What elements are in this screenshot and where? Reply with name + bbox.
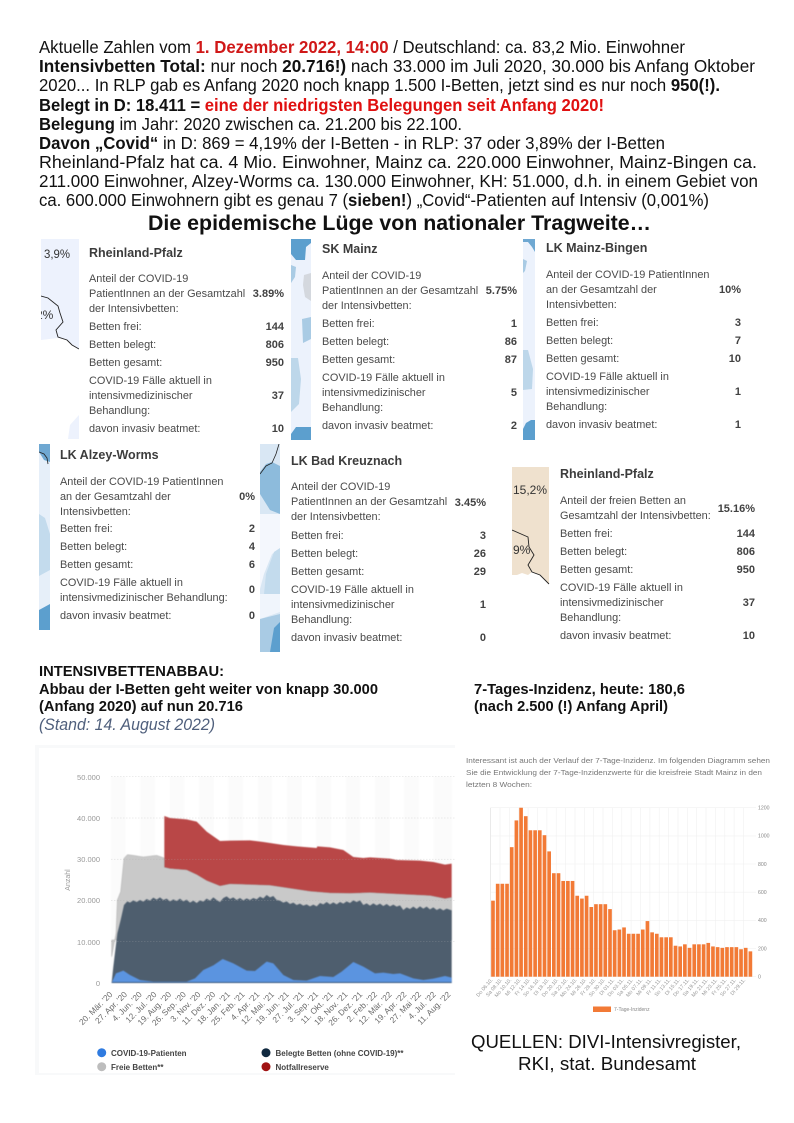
x axis labels: 25. Feb. '21 xyxy=(209,989,247,1027)
heading: Intensivbettenabbau: (Stand: 14. August 2022) xyxy=(39,716,215,734)
panel: LK Bad Kreuznach: Betten frei: xyxy=(291,530,344,542)
panel: Rheinland-Pfalz free beds: COVID-19 Fälle aktuell in xyxy=(560,582,683,594)
y axis labels: 0 xyxy=(758,974,761,980)
panel: Rheinland-Pfalz COVID share: 3.89% xyxy=(253,288,284,300)
x axis labels: So 27.11. xyxy=(719,977,738,998)
panel: SK Mainz: 5 xyxy=(511,386,517,398)
title: LK Bad Kreuznach xyxy=(291,454,402,468)
panel: LK Bad Kreuznach xyxy=(260,444,486,652)
intro text block: ca. 600.000 Einwohnern gibt es genau 7 (sieben!) „Covid“-Patienten auf Intensiv (0,001%) xyxy=(39,190,709,210)
table rows: Anteil der COVID-19 PatientInnen xyxy=(60,476,223,488)
panel: Rheinland-Pfalz free beds: 144 xyxy=(737,528,755,540)
panel: LK Mainz-Bingen: 10 xyxy=(729,352,741,364)
legend xyxy=(97,1048,404,1072)
panel: Rheinland-Pfalz COVID share: 950 xyxy=(266,356,284,368)
heading: 7-Tages-Inzidenz: 7-Tages-Inzidenz, heute: 180,6 xyxy=(474,681,685,698)
panel: LK Alzey-Worms: 4 xyxy=(249,541,255,553)
map: LK Alzey-Worms xyxy=(39,444,50,630)
table rows xyxy=(546,268,709,310)
table rows: Anteil der COVID-19 xyxy=(291,480,390,492)
y axis labels xyxy=(758,806,770,980)
y axis labels: 30.000 xyxy=(77,855,100,864)
intro text block: Aktuelle Zahlen vom 1. Dezember 2022, 14:00 / Deutschland: ca. 83,2 Mio. Einwohner xyxy=(39,37,685,57)
x axis labels: Do 06.10. xyxy=(475,977,495,999)
panel: Rheinland-Pfalz free beds: 15.16% xyxy=(718,502,755,514)
x axis labels: 12. Mär. '22 xyxy=(356,989,394,1027)
legend: COVID-19-Patienten xyxy=(111,1049,187,1058)
x axis labels: 12. Jul. '20 xyxy=(123,989,159,1025)
y axis labels: 20.000 xyxy=(77,896,100,905)
title: SK Mainz xyxy=(322,242,378,256)
panel: LK Alzey-Worms: Betten gesamt: xyxy=(60,559,133,571)
x axis labels: Mi 09.11. xyxy=(636,977,654,997)
x axis labels: Fr 25.11. xyxy=(711,977,729,997)
x axis labels: 4. Jun. '20 xyxy=(110,989,144,1023)
panel: Rheinland-Pfalz COVID share: 37 xyxy=(272,390,284,402)
heading: Intensivbettenabbau: INTENSIVBETTENABBAU: xyxy=(39,663,224,680)
panel: LK Bad Kreuznach: 3.45% xyxy=(455,496,486,508)
title: Rheinland-Pfalz xyxy=(89,246,183,260)
title: LK Alzey-Worms xyxy=(60,448,159,462)
x axis labels: 27. Apr. '20 xyxy=(93,989,129,1026)
panel: LK Bad Kreuznach: Betten belegt: xyxy=(291,548,358,560)
panel: SK Mainz xyxy=(291,239,517,440)
x axis labels: Fr 11.11. xyxy=(646,977,663,997)
panel: Rheinland-Pfalz free beds: Betten gesamt: xyxy=(560,564,633,576)
panel: SK Mainz: 1 xyxy=(511,318,517,330)
x axis labels: Sa 08.10. xyxy=(485,977,504,998)
panel: LK Mainz-Bingen xyxy=(523,239,741,440)
x axis labels: 27. Jul. '21 xyxy=(270,989,306,1025)
panel: Rheinland-Pfalz free beds: Behandlung: xyxy=(560,612,621,624)
panel: LK Bad Kreuznach: Betten gesamt: xyxy=(291,566,364,578)
panel: LK Bad Kreuznach: davon invasiv beatmet: xyxy=(291,632,402,644)
panel: Rheinland-Pfalz free beds: davon invasiv beatmet: xyxy=(560,630,671,642)
x axis labels: 18. Nov. '21 xyxy=(312,989,350,1027)
x axis labels: 20. Mär. '20 xyxy=(77,989,115,1027)
x axis labels: Fr 14.10. xyxy=(514,977,532,997)
panel: LK Mainz-Bingen: 10% xyxy=(719,284,741,296)
table rows: an der Gesamtzahl der xyxy=(60,490,171,502)
panel: SK Mainz: 87 xyxy=(505,354,517,366)
heading: Intensivbettenabbau: (Anfang 2020) auf nun 20.716 xyxy=(39,698,243,715)
table rows: Anteil der freien Betten an xyxy=(560,494,686,506)
panel: Rheinland-Pfalz COVID share: 806 xyxy=(266,338,284,350)
panel: LK Mainz-Bingen: Betten frei: xyxy=(546,316,599,328)
map: LK Mainz-Bingen xyxy=(523,239,535,440)
intro text block: Intensivbetten Total: nur noch 20.716!) nach 33.000 im Juli 2020, 30.000 bis Anfang Oktober xyxy=(39,56,755,76)
x axis labels: 11. Dez. '20 xyxy=(180,989,218,1027)
x axis labels: 3. Nov. '20 xyxy=(168,989,203,1024)
panel: Rheinland-Pfalz COVID share: Behandlung: xyxy=(89,404,150,416)
x axis labels xyxy=(77,989,453,1028)
table rows: Intensivbetten: xyxy=(60,506,131,518)
table rows: Anteil der COVID-19 PatientInnen xyxy=(546,268,709,280)
x axis labels: Mi 12.10. xyxy=(504,977,523,998)
panel: Rheinland-Pfalz COVID share: Betten frei: xyxy=(89,320,142,332)
x axis labels: 11. Okt. '21 xyxy=(298,989,335,1026)
panel: Rheinland-Pfalz free beds: Betten belegt: xyxy=(560,546,627,558)
y axis labels: 800 xyxy=(758,862,767,868)
x axis labels: 26. Dez. '21 xyxy=(326,989,365,1028)
x axis labels: 4. Apr. '21 xyxy=(228,989,262,1022)
x axis labels: 2. Feb. '22 xyxy=(344,989,379,1024)
x axis labels: 19. Apr. '22 xyxy=(372,989,409,1026)
table rows xyxy=(60,476,223,518)
x axis labels: Di 15.11. xyxy=(664,977,682,997)
panel: SK Mainz: intensivmedizinischer xyxy=(322,386,426,398)
x axis labels: Do 20.10. xyxy=(541,977,560,999)
map: LK Bad Kreuznach xyxy=(260,444,280,652)
panel: Rheinland-Pfalz COVID share: 144 xyxy=(266,320,284,332)
heading: Intensivbettenabbau xyxy=(39,663,378,734)
table rows: Anteil der COVID-19 xyxy=(89,272,188,284)
y axis labels: 400 xyxy=(758,918,767,924)
map: SK Mainz xyxy=(291,239,311,440)
panel: Rheinland-Pfalz free beds: intensivmedizinischer xyxy=(560,596,664,608)
y axis labels: 1200 xyxy=(758,806,770,812)
x axis labels: 3. Sep. '21 xyxy=(285,989,320,1024)
y axis labels xyxy=(65,773,100,988)
x axis labels: Sa 22.10. xyxy=(551,977,569,998)
table rows xyxy=(560,494,711,522)
x axis labels: Fr 28.10. xyxy=(580,977,598,997)
x axis labels: 11. Aug. '22 xyxy=(415,989,453,1027)
panel: LK Mainz-Bingen: 7 xyxy=(735,334,741,346)
panel: Rheinland-Pfalz free beds: 806 xyxy=(737,546,755,558)
panel: Rheinland-Pfalz COVID share: davon invasiv beatmet: xyxy=(89,422,200,434)
intro text block: Belegt in D: 18.411 = eine der niedrigsten Belegungen seit Anfang 2020! xyxy=(39,95,604,115)
panel: Rheinland-Pfalz COVID share: 10 xyxy=(272,422,284,434)
x axis labels: Sa 19.11. xyxy=(682,977,700,998)
grid lines xyxy=(491,808,756,977)
x axis labels: Mi 23.11. xyxy=(701,977,719,997)
panel: Rheinland-Pfalz COVID share xyxy=(41,239,284,439)
bars xyxy=(491,808,752,977)
background bands xyxy=(111,777,452,983)
x axis labels: Do 03.11. xyxy=(607,977,626,998)
y axis labels: 40.000 xyxy=(77,814,100,823)
panel: SK Mainz: 5.75% xyxy=(486,284,517,296)
panel: LK Mainz-Bingen: COVID-19 Fälle aktuell in xyxy=(546,370,669,382)
x axis labels: So 30.10. xyxy=(588,977,607,998)
panel: LK Alzey-Worms xyxy=(39,444,255,630)
area: Belegte Betten xyxy=(112,895,452,983)
panel: LK Mainz-Bingen: 1 xyxy=(735,418,741,430)
x axis labels xyxy=(475,977,747,999)
map: Rheinland-Pfalz light blue: 3,9% xyxy=(44,247,70,261)
panel: SK Mainz: Betten gesamt: xyxy=(322,354,395,366)
y axis labels: Anzahl xyxy=(65,869,72,891)
x axis labels: Do 17.11. xyxy=(672,977,691,998)
panel: LK Mainz-Bingen: Behandlung: xyxy=(546,400,607,412)
panel: SK Mainz: 86 xyxy=(505,336,517,348)
x axis labels: 26. Sep. '20 xyxy=(150,989,188,1028)
area: Notfallreserve xyxy=(164,816,452,899)
panel: SK Mainz: davon invasiv beatmet: xyxy=(322,420,433,432)
area: COVID-19-Patienten xyxy=(112,959,452,983)
x axis labels: 12. Mai. '21 xyxy=(239,989,276,1027)
panel: LK Mainz-Bingen: 3 xyxy=(735,316,741,328)
x axis labels: 19. Jun. '21 xyxy=(254,989,291,1027)
panel: Rheinland-Pfalz free beds: Betten frei: xyxy=(560,528,613,540)
intro text block: Rheinland-Pfalz hat ca. 4 Mio. Einwohner, Mainz ca. 220.000 Einwohner, Mainz-Bingen ca. xyxy=(39,152,757,172)
x axis labels: 19. Aug. '20 xyxy=(135,989,173,1027)
map: Rheinland-Pfalz tan xyxy=(512,467,550,584)
panel: LK Alzey-Worms: Betten frei: xyxy=(60,523,113,535)
intro text block: 211.000 Einwohner, Alzey-Worms ca. 130.000 Einwohner, KH: 51.000, d.h. in einem Gebiet von xyxy=(39,171,758,191)
panel: LK Alzey-Worms: 2 xyxy=(249,523,255,535)
panel: Rheinland-Pfalz COVID share: Betten gesamt: xyxy=(89,356,162,368)
y axis labels: 200 xyxy=(758,946,767,952)
x axis labels: 27. Mai '22 xyxy=(388,989,423,1025)
y axis labels: 10.000 xyxy=(77,938,100,947)
table rows xyxy=(89,272,245,314)
x axis labels: Mo 21.11. xyxy=(691,977,710,999)
title: Rheinland-Pfalz xyxy=(560,466,654,480)
panel: LK Mainz-Bingen: Betten belegt: xyxy=(546,334,613,346)
panel: SK Mainz: Behandlung: xyxy=(322,402,383,414)
main heading: Die epidemische Lüge von nationaler Tragweite… xyxy=(148,212,651,235)
panel: Rheinland-Pfalz COVID share: Betten belegt: xyxy=(89,338,156,350)
x axis labels: Di 18.10. xyxy=(533,977,551,997)
table rows: Gesamtzahl der Intensivbetten: xyxy=(560,510,711,522)
legend: Belegte Betten (ohne COVID-19)** xyxy=(276,1049,404,1058)
chart: Intensivbetten area chart xyxy=(64,773,454,1072)
intro text block: Belegung im Jahr: 2020 zwischen ca. 21.200 bis 22.100. xyxy=(39,114,462,134)
y axis labels: 0 xyxy=(96,979,100,988)
map: Rheinland-Pfalz tan: 15,2% xyxy=(513,483,547,497)
heading: 7-Tages-Inzidenz: (nach 2.500 (!) Anfang April) xyxy=(474,698,668,715)
y axis labels: 600 xyxy=(758,890,767,896)
x axis labels: Sa 05.11. xyxy=(616,977,635,998)
panel: LK Bad Kreuznach: 3 xyxy=(480,530,486,542)
panel: LK Bad Kreuznach: 0 xyxy=(480,632,486,644)
table rows: PatientInnen an der Gesamtzahl xyxy=(89,288,245,300)
panel: LK Alzey-Worms: Betten belegt: xyxy=(60,541,127,553)
text: Inzidenz intro paragraph: Interessant ist auch der Verlauf der 7-Tage-Inzidenz. Im folgenden Diagramm sehen xyxy=(466,756,770,765)
panel: SK Mainz: Betten frei: xyxy=(322,318,375,330)
x axis labels: So 16.10. xyxy=(522,977,541,998)
title: LK Mainz-Bingen xyxy=(546,241,647,255)
y axis labels: 1000 xyxy=(758,834,770,840)
table rows: PatientInnen an der Gesamtzahl xyxy=(322,284,478,296)
x axis labels: Mo 10.10. xyxy=(494,977,513,999)
y axis labels: 50.000 xyxy=(77,773,100,782)
panel: LK Alzey-Worms: COVID-19 Fälle aktuell in xyxy=(60,577,183,589)
intro text block: 2020... In RLP gab es Anfang 2020 noch knapp 1.500 I-Betten, jetzt sind es nur noch 950(!). xyxy=(39,75,720,95)
panel: LK Alzey-Worms: 0 xyxy=(249,584,255,596)
panel: LK Bad Kreuznach: 1 xyxy=(480,598,486,610)
panel: SK Mainz: 2 xyxy=(511,420,517,432)
table rows: PatientInnen an der Gesamtzahl xyxy=(291,496,447,508)
panel: LK Alzey-Worms: 0% xyxy=(239,490,255,502)
heading: 7-Tages-Inzidenz xyxy=(474,681,685,715)
panel: Rheinland-Pfalz free beds xyxy=(512,466,755,642)
map: Rheinland-Pfalz light blue xyxy=(41,239,79,439)
x axis labels: Mi 26.10. xyxy=(570,977,588,998)
map: Rheinland-Pfalz tan: 9% xyxy=(513,543,531,557)
panel: LK Bad Kreuznach: COVID-19 Fälle aktuell in xyxy=(291,584,414,596)
x axis labels: So 13.11. xyxy=(654,977,672,998)
panel: SK Mainz: Betten belegt: xyxy=(322,336,389,348)
table rows: der Intensivbetten: xyxy=(322,300,412,312)
panel: LK Alzey-Worms: 0 xyxy=(249,610,255,622)
sources note xyxy=(471,1031,741,1074)
x axis labels: 18. Jan. '21 xyxy=(195,989,232,1027)
x axis labels: Di 29.11. xyxy=(730,977,747,997)
panel: Rheinland-Pfalz COVID share: intensivmedizinischer xyxy=(89,390,193,402)
text: Inzidenz intro paragraph: Sie die Entwicklung der 7-Tage-Inzidenzwerte für die kreisfreie Stadt Mainz in den xyxy=(466,768,762,777)
table rows: Intensivbetten: xyxy=(546,298,617,310)
legend xyxy=(593,1006,650,1013)
table rows xyxy=(322,270,478,312)
x axis labels: Mo 07.11. xyxy=(625,977,644,999)
table rows: der Intensivbetten: xyxy=(291,510,381,522)
panel: LK Alzey-Worms: davon invasiv beatmet: xyxy=(60,610,171,622)
panel: Rheinland-Pfalz COVID share: COVID-19 Fälle aktuell in xyxy=(89,374,212,386)
panel: LK Mainz-Bingen: 1 xyxy=(735,386,741,398)
text: Inzidenz intro paragraph xyxy=(466,756,770,789)
text: Inzidenz intro paragraph: letzten 8 Wochen: xyxy=(466,780,532,789)
x axis labels: 4. Jul. '22 xyxy=(406,989,438,1021)
table rows: der Intensivbetten: xyxy=(89,302,179,314)
x axis labels: Mo 24.10. xyxy=(559,977,579,999)
panel: Rheinland-Pfalz free beds: 10 xyxy=(743,630,755,642)
table rows: Anteil der COVID-19 xyxy=(322,270,421,282)
sources note: QUELLEN: DIVI-Intensivregister, xyxy=(471,1031,741,1052)
table rows: an der Gesamtzahl der xyxy=(546,284,657,296)
area: Freie Betten xyxy=(112,855,452,957)
grid lines xyxy=(111,777,455,942)
panel: LK Bad Kreuznach: 29 xyxy=(474,566,486,578)
panel: LK Mainz-Bingen: Betten gesamt: xyxy=(546,352,619,364)
x axis labels: Di 01.11. xyxy=(599,977,616,997)
legend: Notfallreserve xyxy=(276,1063,329,1072)
panel: LK Bad Kreuznach: Behandlung: xyxy=(291,614,352,626)
heading: Intensivbettenabbau: Abbau der I-Betten geht weiter von knapp 30.000 xyxy=(39,681,378,698)
panel: Rheinland-Pfalz free beds: 37 xyxy=(743,596,755,608)
panel: LK Alzey-Worms: intensivmedizinischer Behandlung: xyxy=(60,592,228,604)
intro text block xyxy=(39,37,758,210)
legend: 7-Tage-Inzidenz xyxy=(614,1007,650,1013)
sources note: RKI, stat. Bundesamt xyxy=(518,1053,696,1074)
panel: LK Bad Kreuznach: 26 xyxy=(474,548,486,560)
panel: SK Mainz: COVID-19 Fälle aktuell in xyxy=(322,372,445,384)
panel: LK Bad Kreuznach: intensivmedizinischer xyxy=(291,598,395,610)
panel: LK Mainz-Bingen: davon invasiv beatmet: xyxy=(546,418,657,430)
panel: LK Alzey-Worms: 6 xyxy=(249,559,255,571)
table rows xyxy=(291,480,447,522)
panel: LK Mainz-Bingen: intensivmedizinischer xyxy=(546,386,650,398)
panel: Rheinland-Pfalz free beds: 950 xyxy=(737,564,755,576)
chart: 7-Tage-Inzidenz bars xyxy=(475,806,770,1013)
intro text block: Davon „Covid“ in D: 869 = 4,19% der I-Betten - in RLP: 37 oder 3,89% der I-Betten xyxy=(39,133,665,153)
legend: Freie Betten** xyxy=(111,1063,164,1072)
